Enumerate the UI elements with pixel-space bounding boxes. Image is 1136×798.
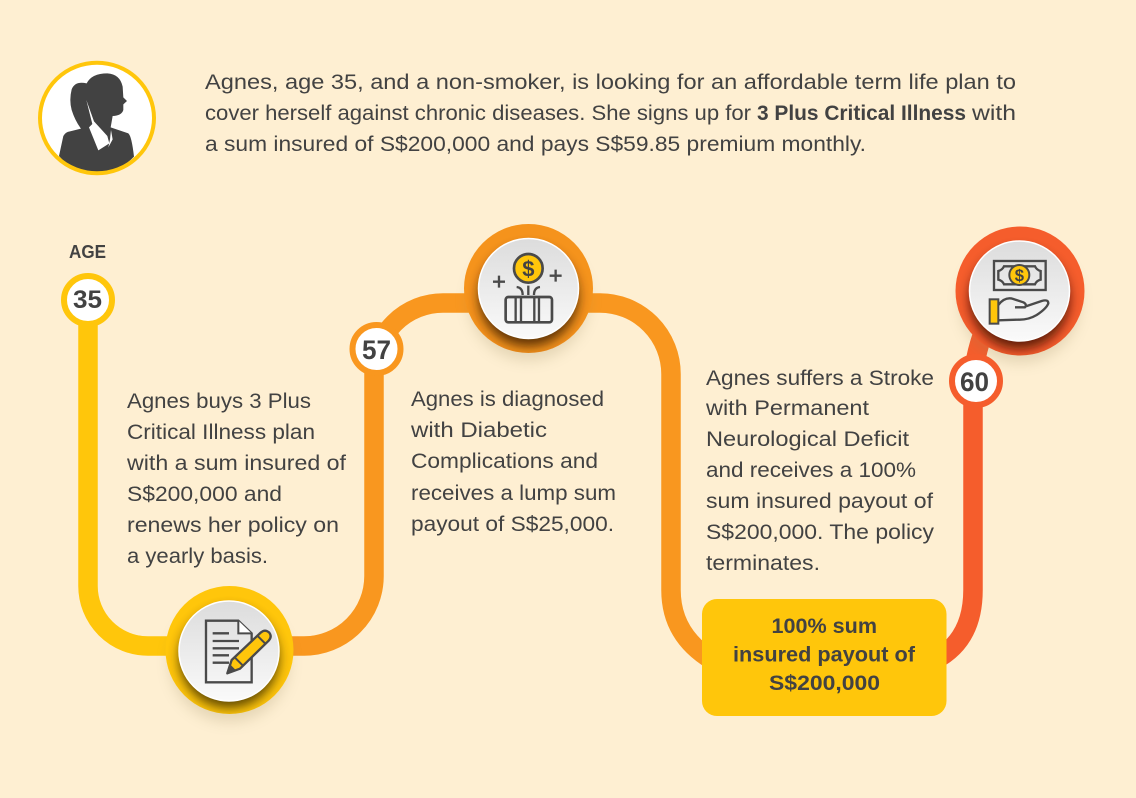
- step 1 text: renews her policy on: [127, 513, 339, 537]
- step 1 text: S$200,000 and: [127, 482, 282, 506]
- callout: payout box: 100% sum: [772, 614, 877, 638]
- icon: banknote over open hand: $: [1015, 266, 1025, 285]
- intro paragraph: cover herself against chronic diseases. She signs up for: [205, 101, 751, 125]
- timeline path: yellow segment: [88, 300, 235, 646]
- step 2 text: Complications and: [411, 449, 598, 473]
- step 2 text: Agnes is diagnosed: [411, 387, 604, 411]
- step 3 text: sum insured payout of: [706, 489, 933, 513]
- age badge 60: [952, 357, 1000, 405]
- step 2 text: payout of S$25,000.: [411, 512, 614, 536]
- intro paragraph: 3 Plus Critical Illness: [757, 101, 966, 125]
- icon circle: policy document and pencil: [166, 586, 294, 722]
- intro paragraph: Agnes, age 35, and a non-smoker, is looking for an affordable term life plan to: [205, 70, 1016, 94]
- timeline path: orange segment: [225, 303, 712, 660]
- age badge 35: [64, 276, 112, 324]
- age badge 60: 60: [960, 367, 989, 397]
- intro paragraph: [205, 70, 1016, 156]
- step 3 text: terminates.: [706, 551, 820, 575]
- callout: payout box: [702, 599, 946, 716]
- portrait of Agnes: [40, 63, 154, 174]
- step 3 text: Agnes suffers a Stroke: [706, 366, 934, 390]
- icon: document with pencil: [206, 621, 271, 682]
- icon: coin and gift box: $: [522, 256, 534, 281]
- step 1 text: a yearly basis.: [127, 544, 268, 568]
- intro paragraph: a sum insured of S$200,000 and pays S$59.85 premium monthly.: [205, 132, 866, 156]
- step 2 text: [410, 387, 616, 536]
- callout: payout box: S$200,000: [769, 671, 880, 695]
- intro paragraph: with: [971, 101, 1016, 125]
- icon circle: cash in hand: [956, 226, 1084, 363]
- age label: AGE: [69, 242, 106, 262]
- step 3 text: and receives a 100%: [706, 458, 916, 482]
- step 1 text: [126, 389, 346, 568]
- age badge 35: 35: [73, 286, 102, 314]
- step 2 text: with Diabetic: [410, 418, 547, 442]
- age badge 57: [352, 325, 400, 373]
- step 3 text: Neurological Deficit: [706, 427, 909, 451]
- step 3 text: S$200,000. The policy: [706, 520, 934, 544]
- step 3 text: with Permanent: [705, 396, 869, 420]
- step 2 text: receives a lump sum: [411, 481, 616, 505]
- age badge 57: 57: [362, 335, 391, 365]
- step 1 text: with a sum insured of: [126, 451, 346, 475]
- step 3 text: [705, 366, 934, 575]
- timeline path: red segment: [935, 315, 990, 660]
- step 1 text: Agnes buys 3 Plus: [127, 389, 311, 413]
- step 1 text: Critical Illness plan: [127, 420, 315, 444]
- callout: payout box: insured payout of: [733, 642, 916, 666]
- icon circle: lump sum payout: [464, 224, 593, 360]
